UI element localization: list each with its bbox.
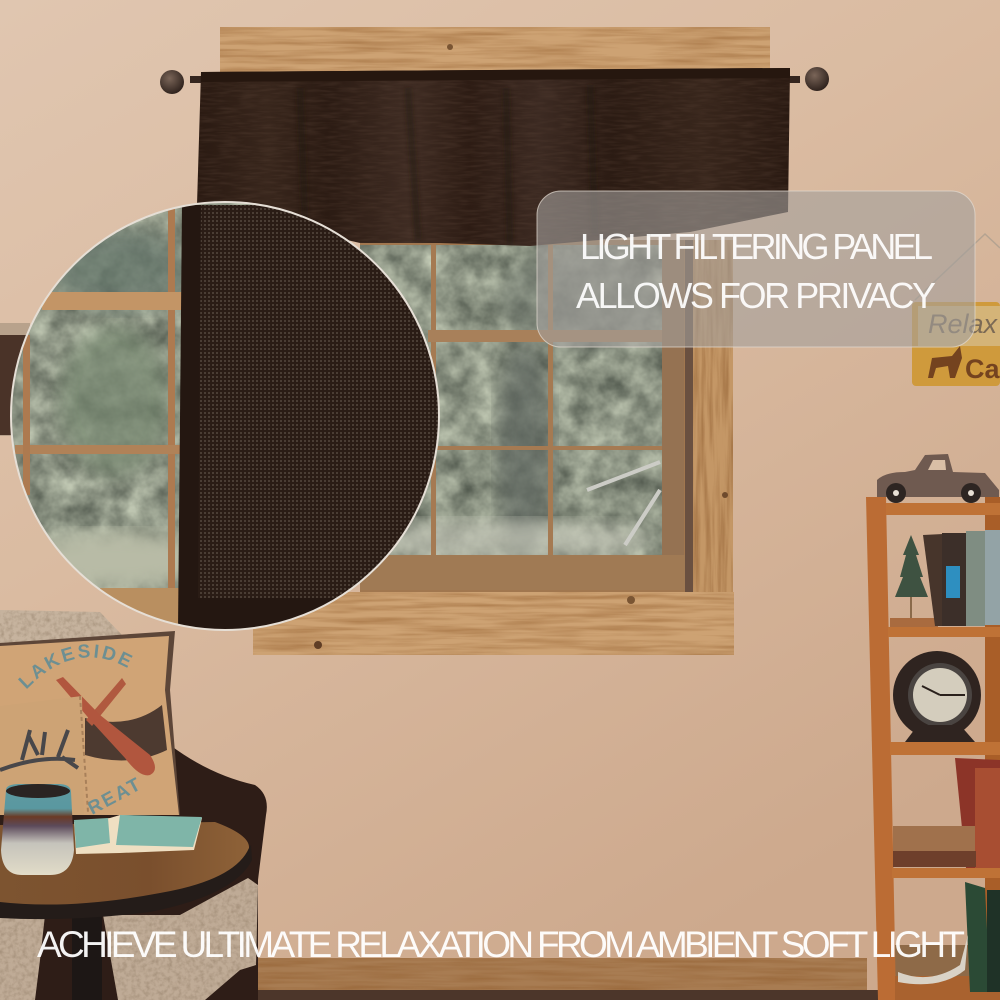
mug bbox=[1, 784, 74, 875]
throw blanket top bbox=[0, 610, 122, 650]
small wall picture at left edge bbox=[0, 323, 30, 436]
wooden window casing bbox=[220, 27, 770, 655]
lakeside pillow: REAT bbox=[84, 773, 146, 819]
icon: clock bbox=[893, 651, 981, 742]
icon: toy truck bbox=[877, 454, 999, 503]
open teal book bbox=[74, 815, 202, 854]
armchair bbox=[0, 745, 267, 1000]
icon: small tree bbox=[890, 535, 938, 627]
small elk pillow bbox=[0, 696, 84, 815]
side table bbox=[0, 822, 252, 919]
caption: ambient soft light: ACHIEVE ULTIMATE RELAXATION FROM AMBIENT SOFT LIGHT bbox=[37, 924, 965, 965]
callout: light filtering panel: LIGHT FILTERING PANEL bbox=[580, 226, 933, 267]
lakeside pillow bbox=[0, 631, 180, 819]
baseboard bbox=[255, 945, 970, 1000]
wall sign: Ca bbox=[965, 354, 1000, 384]
bookshelf with decor bbox=[866, 454, 1000, 1000]
wall sign: Relax bbox=[928, 309, 999, 339]
callout: light filtering panel: ALLOWS FOR PRIVACY bbox=[576, 275, 936, 316]
books upper shelf bbox=[923, 530, 1000, 626]
brown valance curtain bbox=[197, 68, 790, 246]
wall sign bbox=[912, 234, 1000, 386]
antler bbox=[898, 935, 968, 984]
curtain rod with finials bbox=[160, 67, 829, 94]
magnified circular inset bbox=[0, 200, 450, 640]
window with forest view bbox=[350, 240, 693, 592]
books lower shelves bbox=[893, 758, 1000, 992]
blanket below table bbox=[0, 878, 258, 1000]
lakeside pillow: LAKESIDE bbox=[18, 644, 132, 689]
callout: light filtering panel bbox=[537, 191, 975, 347]
